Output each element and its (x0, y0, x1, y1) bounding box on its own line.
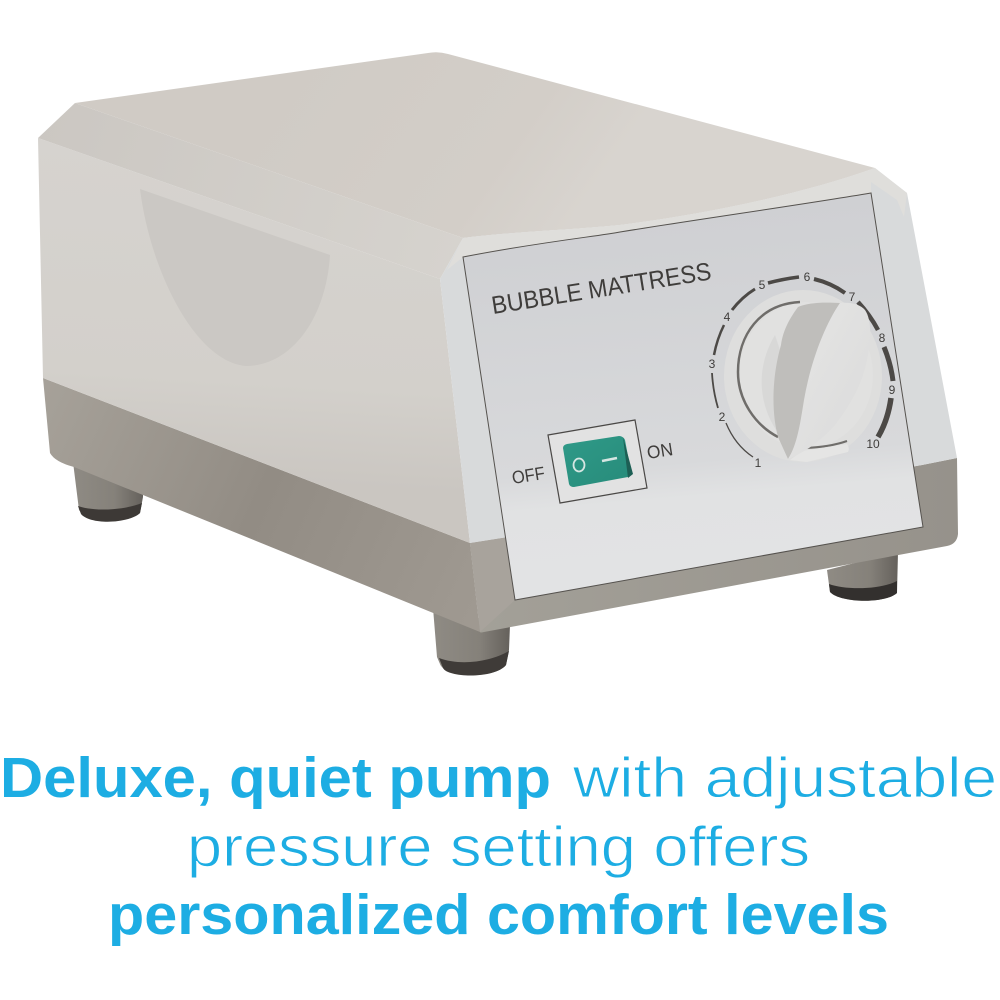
dial scale: 5 (759, 278, 766, 292)
base corner: front left (470, 537, 515, 632)
front frame (440, 168, 957, 543)
front panel (463, 193, 923, 600)
top face (75, 52, 875, 238)
dial scale: 7 (849, 290, 856, 304)
dial scale: 3 (709, 357, 716, 371)
caption line 3: personalized comfort levels (108, 883, 889, 947)
foot: rear left (73, 462, 143, 522)
switch symbol: on (602, 458, 617, 461)
base front (470, 458, 958, 632)
dial scale: 4 (724, 310, 731, 324)
side face (38, 138, 470, 543)
pump device (38, 52, 958, 676)
caption line 2: pressure setting offers (187, 815, 810, 879)
foot: front (433, 608, 510, 676)
dial scale: 1 (755, 456, 762, 470)
dial scale (709, 270, 896, 470)
caption line 1: with adjustable (572, 746, 997, 810)
switch symbol: off (574, 458, 584, 472)
knob pointer light side (788, 303, 870, 459)
dial knob (724, 290, 882, 462)
knob pointer dark side (773, 303, 840, 459)
dial scale: 9 (889, 383, 896, 397)
label: OFF: OFF (510, 463, 546, 488)
dial scale: 6 (804, 270, 811, 284)
caption line 1: Deluxe, quiet pump (0, 746, 551, 810)
dial scale: 2 (719, 410, 726, 424)
knob base ring (724, 290, 882, 462)
rocker switch (548, 420, 647, 503)
top bevel (38, 103, 463, 279)
dial scale: 8 (879, 331, 886, 345)
label: BUBBLE MATTRESS: BUBBLE MATTRESS (490, 258, 713, 320)
front lip (447, 168, 907, 270)
foot: right (827, 552, 898, 601)
label: ON: ON (645, 439, 674, 463)
caption line 1 (0, 746, 997, 810)
side recess (140, 189, 330, 366)
base band (43, 378, 480, 632)
knob base lip (790, 444, 849, 462)
dial scale: 10 (866, 437, 880, 451)
caption (0, 746, 997, 947)
knob body (739, 302, 873, 448)
